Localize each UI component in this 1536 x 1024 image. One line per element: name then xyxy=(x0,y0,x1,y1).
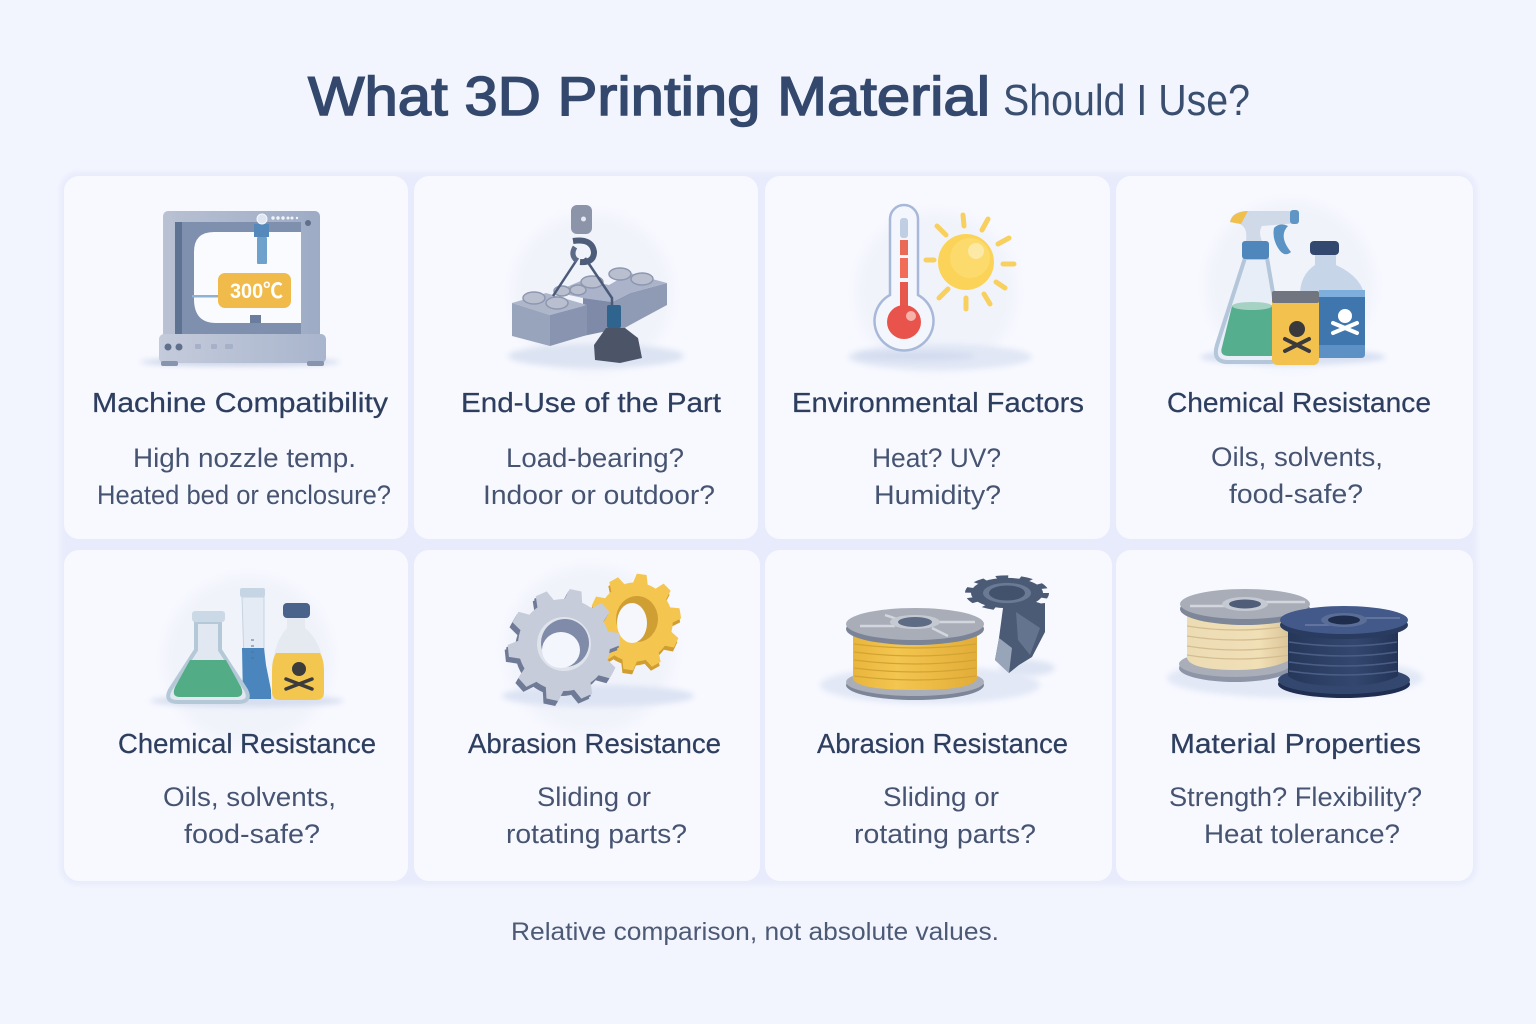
temperature badge: 300℃ xyxy=(230,280,283,303)
body text xyxy=(97,443,391,510)
panel: environmental factors xyxy=(765,176,1110,539)
heading: Abrasion Resistance xyxy=(817,728,1068,759)
panel: material properties xyxy=(1116,550,1473,881)
body text xyxy=(163,782,336,849)
heading: Chemical Resistance xyxy=(118,728,376,759)
panel: abrasion resistance gears xyxy=(414,550,760,881)
body text: Load-bearing? xyxy=(506,443,684,473)
title: Should I Use? xyxy=(1003,76,1250,125)
body text xyxy=(506,782,687,849)
icon: 3D printer xyxy=(140,211,340,366)
body text: Oils, solvents, xyxy=(163,782,336,812)
title: What 3D Printing Material xyxy=(308,65,990,127)
body text: Strength? Flexibility? xyxy=(1169,782,1422,812)
gray gear xyxy=(495,579,630,716)
body text: Heat tolerance? xyxy=(1204,819,1400,849)
body text: Indoor or outdoor? xyxy=(483,480,715,510)
body text: Sliding or xyxy=(883,782,999,812)
panel: chemical resistance bottom xyxy=(64,550,408,881)
footer note: Relative comparison, not absolute values. xyxy=(511,918,999,946)
body text: food-safe? xyxy=(184,819,320,849)
icon: chemical containers xyxy=(1200,201,1386,369)
yellow gear xyxy=(582,568,687,680)
panel: machine compatibility xyxy=(64,176,408,539)
icon: beige and navy spools xyxy=(1167,589,1423,698)
heading: Environmental Factors xyxy=(792,387,1084,418)
panel: abrasion resistance spool xyxy=(765,550,1112,881)
icon: lab glassware xyxy=(150,576,344,744)
icon: thermometer and sun xyxy=(848,205,1032,372)
panel: chemical resistance top xyxy=(1116,176,1473,539)
icon: gears xyxy=(495,566,694,734)
body text: Humidity? xyxy=(874,480,1001,510)
body text xyxy=(854,782,1036,849)
temperature badge xyxy=(218,273,291,308)
heading: Material Properties xyxy=(1170,728,1421,759)
body text: Sliding or xyxy=(537,782,651,812)
panel: end-use of the part xyxy=(414,176,758,539)
heading: Abrasion Resistance xyxy=(468,728,721,759)
icon: yellow spool and worn gear xyxy=(820,577,1055,704)
title xyxy=(308,65,1250,127)
body text: rotating parts? xyxy=(506,819,687,849)
body text xyxy=(1211,442,1383,509)
heading: Chemical Resistance xyxy=(1167,387,1431,418)
body text xyxy=(1169,782,1422,849)
body text: Heat? UV? xyxy=(872,443,1001,473)
body text xyxy=(483,443,715,510)
body text: rotating parts? xyxy=(854,819,1036,849)
body text xyxy=(872,443,1001,510)
heading: End-Use of the Part xyxy=(461,387,721,418)
icon: lifted bricks and weight xyxy=(508,205,684,373)
body text: Heated bed or enclosure? xyxy=(97,480,391,510)
heading: Machine Compatibility xyxy=(92,387,388,418)
body text: food-safe? xyxy=(1229,479,1363,509)
body text: High nozzle temp. xyxy=(133,443,356,473)
body text: Oils, solvents, xyxy=(1211,442,1383,472)
